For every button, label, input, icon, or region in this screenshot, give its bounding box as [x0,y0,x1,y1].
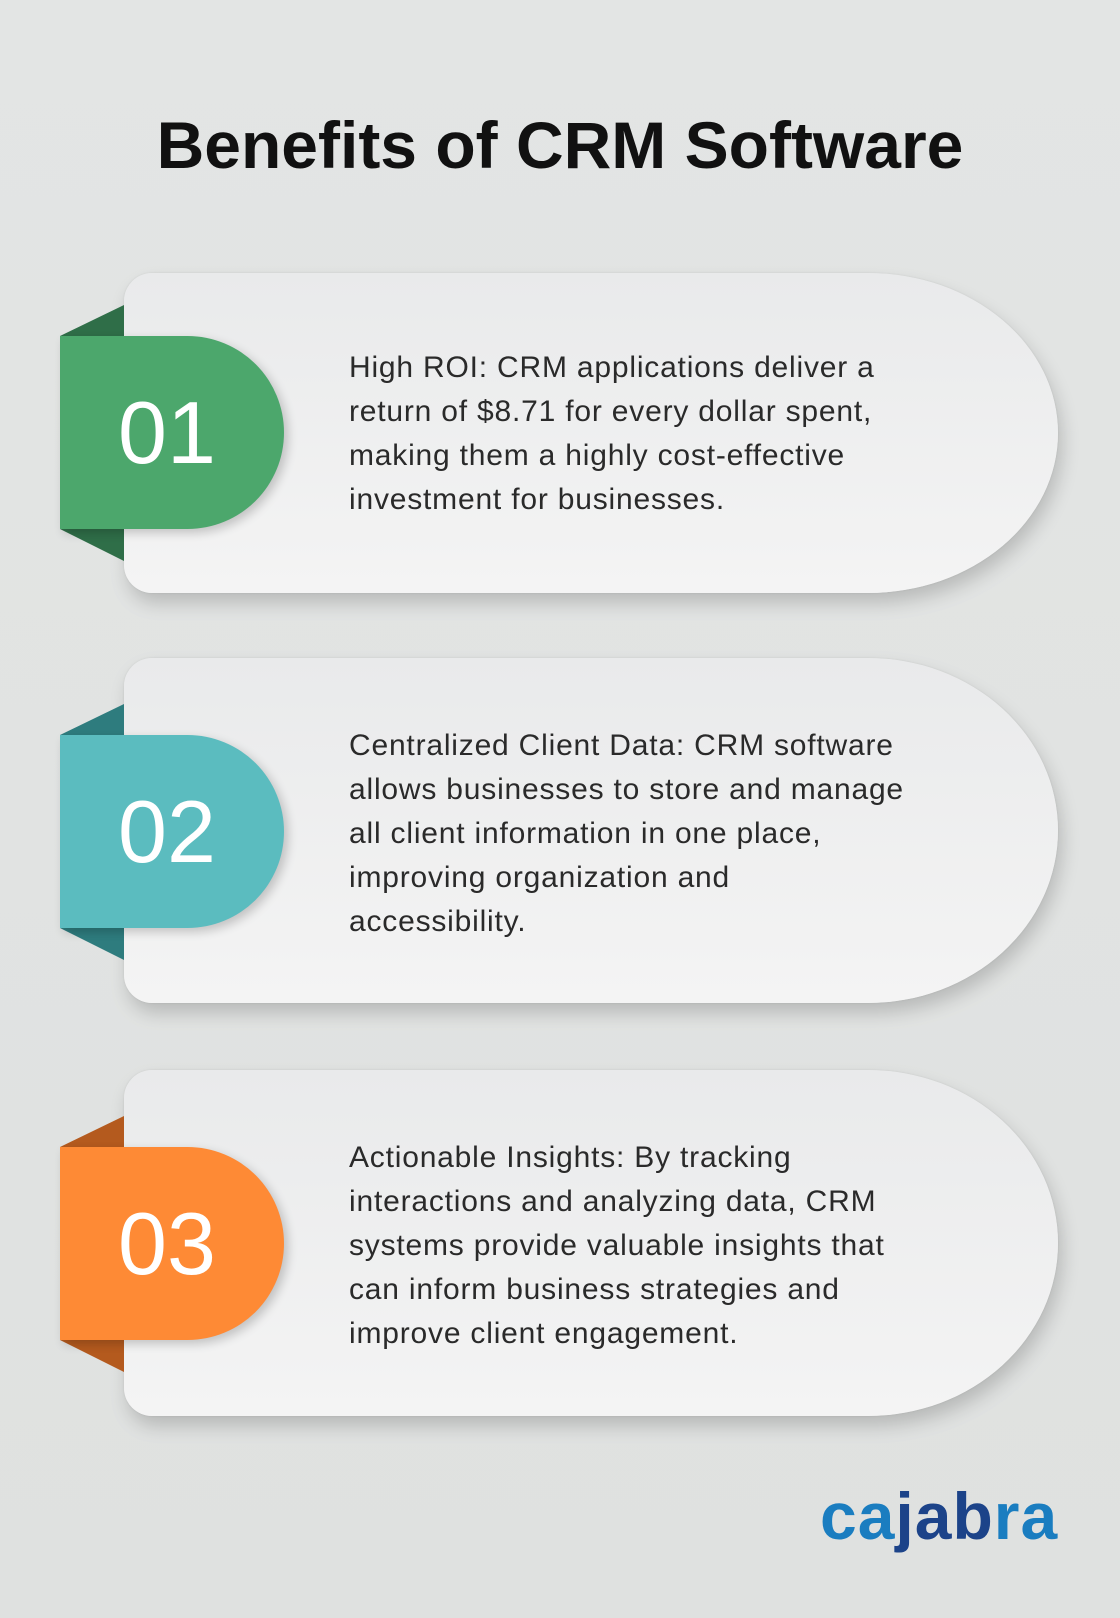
text 3: interactions and analyzing data, CRM [349,1185,876,1218]
tab: 02 [60,735,284,928]
text 2: improving organization and [349,861,730,894]
text 2: allows businesses to store and manage [349,773,904,806]
fold 2 [60,704,124,960]
text 3: Actionable Insights: By tracking [349,1141,791,1174]
text 1: investment for businesses. [349,483,725,516]
text 1: High ROI: CRM applications deliver a [349,351,875,384]
text 2: accessibility. [349,905,526,938]
text 3 [349,1141,885,1350]
tab: 03: 03 [118,1194,216,1292]
text 2: all client information in one place, [349,817,821,850]
panel: card 1 [124,273,1058,593]
logo: cajabra [820,1479,1058,1553]
text 3: systems provide valuable insights that [349,1229,885,1262]
panel: card 3 [124,1070,1058,1416]
text 1 [349,351,875,516]
text 2 [349,729,904,938]
title: Benefits of CRM Software [157,108,963,182]
text 1: making them a highly cost-effective [349,439,845,472]
panel: card 2 [124,658,1058,1003]
fold 1 [60,305,124,561]
text 1: return of $8.71 for every dollar spent, [349,395,872,428]
tab: 03 [60,1147,284,1340]
text 3: improve client engagement. [349,1317,738,1350]
tab: 01 [60,336,284,529]
text 3: can inform business strategies and [349,1273,840,1306]
tab: 02: 02 [118,782,216,880]
tab: 01: 01 [118,382,216,482]
fold 3 [60,1116,124,1372]
text 2: Centralized Client Data: CRM software [349,729,894,762]
